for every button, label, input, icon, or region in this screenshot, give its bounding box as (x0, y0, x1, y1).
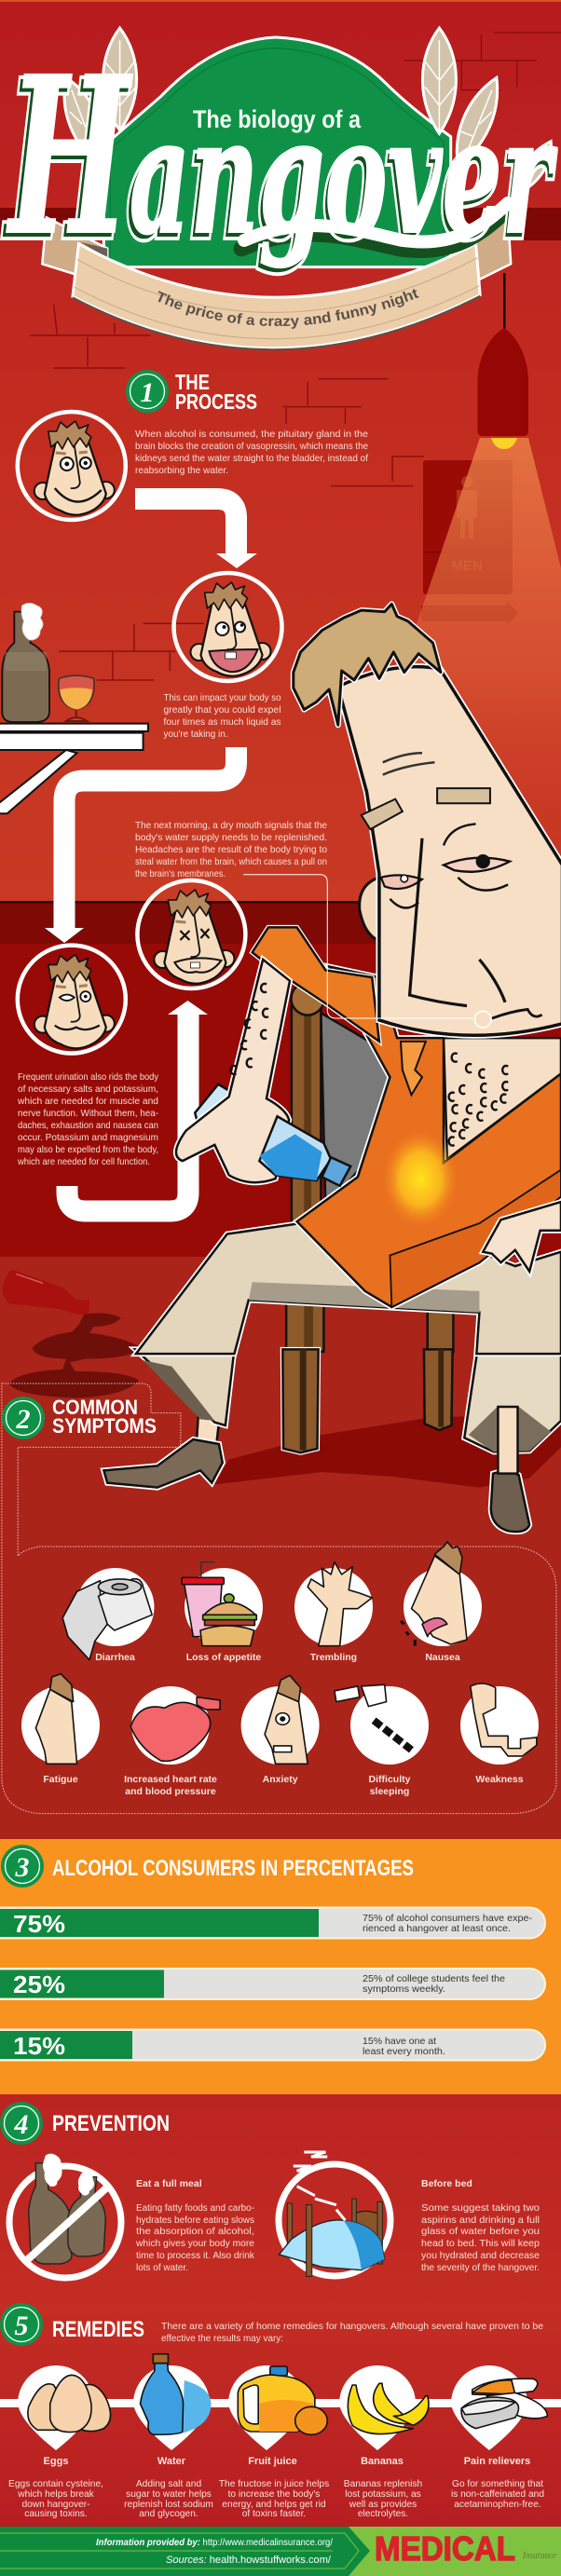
subtitle: The price of a crazy and funny night (158, 289, 419, 329)
eggs text: Eggs contain cysteine, (8, 2479, 103, 2489)
paragraph: pituitary: brain blocks the creation of vasopressin, which means the (135, 441, 368, 452)
remedy labels: Fruit juice (248, 2456, 297, 2467)
scarf on chair (253, 927, 379, 1042)
paragraph: frequent urination: which are needed for muscle and (17, 1096, 158, 1107)
remedies intro: effective the results may vary: (161, 2333, 283, 2344)
section 2 heading: SYMPTOMS (52, 1414, 157, 1438)
white discs (21, 1686, 539, 1765)
water bottle (259, 1116, 331, 1180)
bar: 15 percent: 15% (13, 2032, 65, 2060)
icon: toilet roll (62, 1579, 152, 1660)
footer (0, 2527, 561, 2576)
left lower leg and shoe (103, 1349, 561, 1532)
symptom labels row one: Loss of appetite (186, 1652, 261, 1663)
section 2 badge (2, 1397, 45, 1439)
icon: bed and snoring (279, 2152, 390, 2276)
blanket (279, 2220, 385, 2270)
medical logo: MEDICAL (375, 2529, 515, 2568)
bed headboard (354, 2211, 379, 2257)
paragraph: next morning (135, 820, 327, 879)
section 2 heading (52, 1396, 157, 1438)
icon: heart (130, 1697, 220, 1761)
trouser underside shade (249, 1282, 479, 1313)
section 3 heading: ALCOHOL CONSUMERS IN PERCENTAGES (52, 1856, 414, 1881)
water text: Adding salt and (136, 2479, 201, 2489)
eggs text: causing toxins. (24, 2509, 88, 2519)
symptom labels row two (43, 1774, 524, 1797)
hair (294, 604, 441, 775)
bananas text: well as provides (349, 2500, 417, 2510)
paragraph: liquid: four times as much liquid as (164, 716, 281, 728)
swash highlight (244, 203, 508, 242)
prevention: eat a full meal: Eat a full meal (136, 2178, 202, 2189)
prevention: eat a full meal: which gives your body more (135, 2238, 254, 2249)
icon: nausea head (401, 1542, 467, 1646)
section 4 badge: 4 (13, 2109, 28, 2140)
restroom sign (421, 460, 518, 626)
symptom labels row two: and blood pressure (125, 1786, 216, 1797)
pain relievers text: Go for something that (452, 2479, 543, 2489)
insurance script: Insurance (522, 2551, 556, 2561)
arm hair (230, 984, 268, 1074)
icon: pills (461, 2378, 547, 2429)
water text (124, 2479, 213, 2519)
wheat ears (64, 28, 551, 193)
red bottle (3, 1270, 89, 1315)
icon: no beer (9, 2154, 121, 2278)
paragraph: liquid (164, 692, 281, 740)
bar: 25 percent: symptoms weekly. (363, 1983, 445, 1995)
eyebrows (362, 799, 403, 829)
snore trail (294, 2152, 345, 2220)
prevention: eat a full meal: Eating fatty foods and carbo- (136, 2202, 254, 2214)
arrow one (135, 499, 257, 568)
water text: sugar to water helps (126, 2489, 212, 2500)
eggs text: which helps break (17, 2489, 95, 2500)
juice text: to increase the body's (228, 2489, 320, 2500)
remedy labels: Bananas (361, 2456, 404, 2467)
paragraph: frequent urination (17, 1071, 159, 1167)
ribbon fold shadow (80, 242, 476, 258)
icon: anxiety head (265, 1675, 308, 1764)
remedies band and markers (0, 2365, 561, 2450)
water bottle behind (195, 1084, 236, 1141)
symptom labels row one: Nausea (425, 1652, 460, 1663)
paragraph: next morning: The next morning, a dry mouth signals that the (135, 820, 327, 831)
process arrows (45, 499, 257, 1211)
wall bricks (31, 33, 561, 680)
remedy descriptions (8, 2479, 544, 2519)
stain glow (383, 1131, 458, 1227)
chest hair (449, 1054, 508, 1146)
bananas text: lost potassium, as (345, 2489, 421, 2500)
remedy labels (44, 2456, 530, 2467)
spilled red bottle and puddle (3, 1270, 139, 1398)
bar: 75 percent (0, 1908, 545, 1938)
face: dizzy (137, 880, 245, 988)
prevention: before bed: aspirins and drinking a full (421, 2215, 540, 2226)
paragraph: liquid: greatly that you could expel (164, 704, 281, 716)
face: tired (18, 946, 126, 1054)
paragraph: liquid: you're taking in. (164, 729, 227, 740)
symptom labels row one: Diarrhea (95, 1652, 135, 1663)
lamp bulb (491, 438, 517, 449)
prevention: before bed: the severity of the hangover. (421, 2262, 540, 2273)
nose and mouth (410, 838, 505, 1006)
section 1 badge (126, 370, 169, 413)
bar: 15 percent (0, 2029, 545, 2061)
face: happy (18, 412, 126, 520)
footer info line: Information provided by: http://www.medicalinsurance.org/ (96, 2537, 333, 2548)
eyes (381, 875, 422, 889)
water text: replenish lost sodium (124, 2500, 213, 2510)
restroom sign: MEN (451, 558, 483, 574)
paragraph: pituitary: kidneys send the water straight to the bladder, instead of (135, 453, 368, 464)
paragraph: next morning: the brain's membranes. (135, 868, 226, 879)
green title shield (103, 37, 451, 267)
bananas text: Bananas replenish (344, 2479, 422, 2489)
chair back and posts (286, 982, 453, 1352)
floor shadow under chair (214, 1413, 561, 1488)
paragraph: frequent urination: Frequent urination also rids the body (18, 1071, 159, 1083)
prevention: before bed (421, 2178, 540, 2273)
arm and hand (176, 960, 290, 1182)
bar: 75 percent: 75% (13, 1910, 65, 1938)
chair legs lower (282, 1349, 453, 1452)
beer bottle (2, 603, 49, 722)
symptom labels row one: Trembling (310, 1652, 357, 1663)
paragraph: frequent urination: nerve function. Without them, hea- (18, 1108, 158, 1119)
section 4 badge (0, 2102, 43, 2145)
symptom icons row two (21, 1674, 539, 1765)
symptom icons row one (62, 1542, 482, 1660)
ribbon back folds (42, 217, 107, 275)
section 1 badge: 1 (140, 377, 155, 408)
head (338, 667, 561, 1035)
paragraph: frequent urination: may also be expelled from the body, (18, 1144, 158, 1155)
puddle (9, 1313, 139, 1398)
juice text: The fructose in juice helps (219, 2479, 329, 2489)
section 4 heading: PREVENTION (52, 2111, 170, 2136)
icon: water bottle (140, 2354, 212, 2434)
icon: trembling hand (308, 1562, 372, 1646)
section 3 badge (1, 1845, 44, 1888)
section 2 badge: 2 (15, 1404, 30, 1435)
prevention: before bed: glass of water before you (421, 2226, 540, 2237)
paragraph: pituitary: reabsorbing the water. (135, 465, 228, 476)
juice text (219, 2479, 329, 2519)
bananas text: electrolytes. (358, 2509, 408, 2519)
prevention: before bed: Some suggest taking two (421, 2202, 540, 2214)
bottle and glass on table (0, 603, 148, 813)
bar: 25 percent: 25% of college students feel the (363, 1973, 505, 1984)
section 5 badge: 5 (15, 2310, 28, 2341)
remedies intro: There are a variety of home remedies for hangovers. Although several have proven to be (161, 2321, 543, 2332)
symptom labels row two: sleeping (370, 1786, 409, 1797)
paragraph: next morning: steal water from the brain, which causes a pull on (135, 856, 327, 867)
right hand (483, 1202, 561, 1272)
light cone (368, 438, 561, 838)
icon: eggs (28, 2375, 111, 2433)
remedy labels: Pain relievers (464, 2456, 530, 2467)
icon: juice jug (238, 2366, 327, 2434)
section 1 heading (175, 370, 257, 414)
callout line to mouth (243, 875, 474, 1018)
section 1 heading: THE (175, 370, 210, 394)
paragraph: next morning: Headaches are the result of the body trying to (135, 844, 327, 855)
paragraph: frequent urination: which are needed for cell function. (17, 1156, 150, 1167)
remedies intro (161, 2321, 543, 2344)
prevention: eat a full meal: lots of water. (136, 2262, 188, 2273)
bar: 25 percent (0, 1969, 545, 1999)
section 2 heading: COMMON (52, 1396, 138, 1419)
prevention: eat a full meal: hydrates before eating slows (136, 2215, 254, 2226)
ribbon front (73, 244, 480, 348)
icon: soda and burger (182, 1562, 256, 1646)
shirt (297, 967, 561, 1307)
upper body (136, 667, 561, 1354)
prevention: eat a full meal: time to process it. Also drink (136, 2250, 255, 2261)
remedy labels: Eggs (44, 2456, 68, 2467)
bar: 75 percent: 75% of alcohol consumers have expe- (363, 1913, 533, 1924)
icon: bananas (348, 2383, 429, 2434)
symptom labels row two: Anxiety (263, 1774, 298, 1785)
pain relievers text: is non-caffeinated and (451, 2489, 544, 2500)
symptom labels row two: Weakness (475, 1774, 524, 1785)
wine glass (59, 675, 94, 721)
paragraph: liquid: This can impact your body so (164, 692, 281, 703)
section 1 heading: PROCESS (175, 389, 257, 414)
arrow two (45, 747, 237, 943)
main title: Hangover (2, 29, 558, 288)
prevention: before bed: head to bed. This will keep (421, 2238, 540, 2249)
section 3 badge: 3 (15, 1852, 30, 1883)
symptom labels row two: Increased heart rate (124, 1774, 217, 1785)
symptom labels row one (95, 1652, 460, 1663)
paragraph: frequent urination: of necessary salts and potassium, (18, 1084, 158, 1095)
face: drunk grin (173, 573, 281, 681)
hung over man in chair (103, 604, 561, 1532)
ribbon banner (42, 217, 511, 349)
chest skin (444, 1038, 561, 1159)
prevention: eat a full meal (135, 2178, 255, 2273)
icon: torn sheet and zigzag (335, 1684, 411, 1750)
table (0, 724, 148, 813)
pain relievers text: acetaminophen-free. (454, 2500, 541, 2510)
bar: 15 percent: 15% have one at (363, 2036, 436, 2047)
paragraph: pituitary: When alcohol is consumed, the pituitary gland in the (135, 429, 368, 440)
heading line: The biology of a: The biology of a (193, 105, 362, 133)
eggs text: down hangover- (21, 2500, 90, 2510)
bar: 15 percent: least every month. (363, 2046, 445, 2057)
remedy icons (28, 2354, 547, 2434)
arrow three (67, 1001, 208, 1211)
icon: weak arm (471, 1683, 537, 1756)
bananas text (344, 2479, 422, 2519)
trousers upper (136, 1223, 561, 1354)
prevention: before bed: Before bed (421, 2178, 472, 2189)
symptom labels row two: Fatigue (43, 1774, 78, 1785)
prevention: before bed: you hydrated and decrease (421, 2250, 540, 2261)
bar: 25 percent: 25% (13, 1970, 65, 1998)
paragraph: frequent urination: daches, exhaustion and nausea can (18, 1120, 158, 1131)
right lower leg and shoe (464, 1349, 561, 1532)
section 5 heading: REMEDIES (52, 2317, 144, 2342)
white discs (76, 1568, 482, 1646)
lamp shade (477, 328, 528, 436)
footer sources line: Sources: health.howstuffworks.com/ (166, 2555, 332, 2566)
paragraph: next morning: body's water supply needs to be replenished. (135, 832, 327, 843)
icon: fatigue head (35, 1674, 77, 1764)
paragraph: pituitary (135, 429, 368, 476)
remedy labels: Water (157, 2456, 186, 2467)
swash shadow (241, 211, 505, 251)
ear (360, 878, 383, 942)
paragraph: frequent urination: occur. Potassium and magnesium (18, 1132, 158, 1143)
lamp cord (503, 273, 505, 331)
section 5 badge (0, 2303, 43, 2346)
pain relievers text (451, 2479, 544, 2510)
bed post (307, 2205, 312, 2276)
dotted symptoms frame (2, 1383, 556, 1814)
symptom labels row two: Difficulty (369, 1774, 411, 1785)
juice text: energy, and helps get rid (222, 2500, 326, 2510)
bar: 75 percent: rienced a hangover at least once. (363, 1923, 511, 1934)
juice text: of toxins faster. (242, 2509, 306, 2519)
water text: and glycogen. (139, 2509, 198, 2519)
prevention: eat a full meal: the absorption of alcohol, (136, 2226, 254, 2237)
hanging lamp, light cone and men's room sign (368, 273, 561, 838)
eggs text (8, 2479, 103, 2519)
